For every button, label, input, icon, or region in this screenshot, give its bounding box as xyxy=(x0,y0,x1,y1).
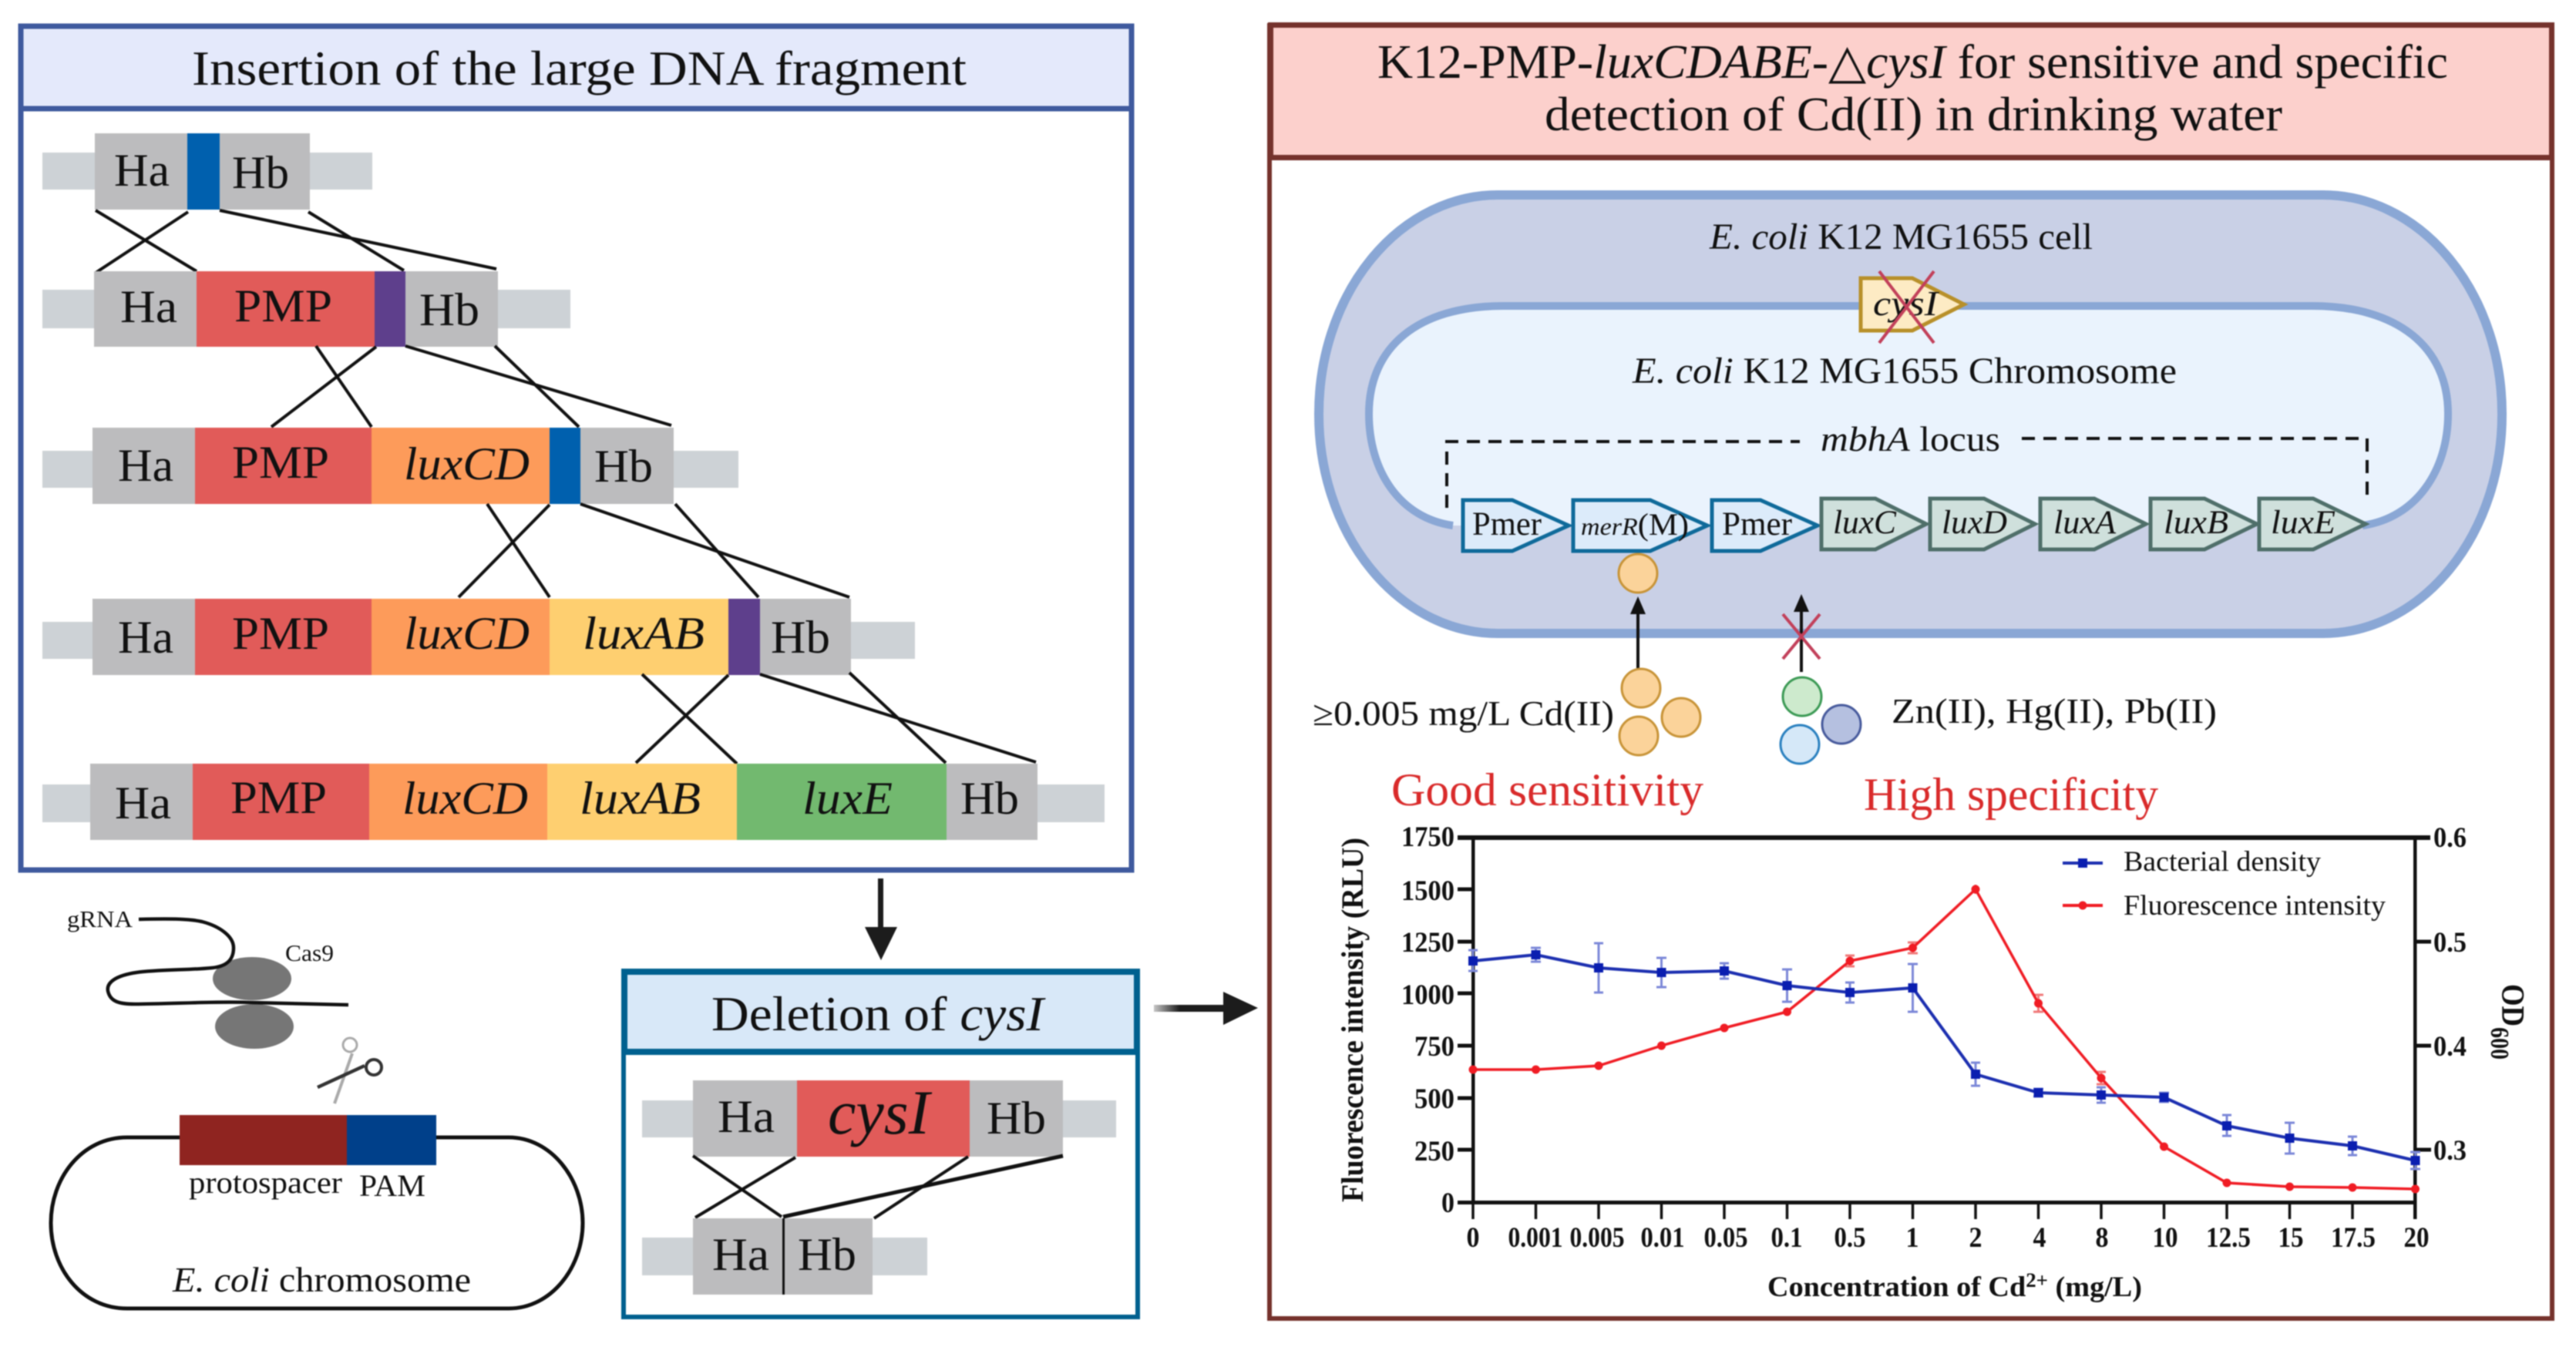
interfering metals label: Zn(II), Hg(II), Pb(II) xyxy=(1892,691,2217,731)
construct row 2: PMP xyxy=(234,280,332,331)
PAM block xyxy=(347,1115,436,1165)
x axis tick labels: 2 xyxy=(1969,1222,1982,1254)
arrow: Cd activates xyxy=(1630,596,1646,668)
panel header: insertion xyxy=(21,26,1132,109)
construct row 2 xyxy=(42,271,570,347)
construct row 5: Hb xyxy=(960,773,1019,824)
y axis title left: Fluorescence intensity (RLU) xyxy=(1335,838,1370,1202)
Cas9 protein xyxy=(213,957,294,1049)
High specificity label: High specificity xyxy=(1864,769,2158,820)
construct row 1 xyxy=(42,133,372,210)
legend: Fluorescence intensity xyxy=(2124,890,2386,922)
gene: luxE xyxy=(2259,499,2366,549)
gene: Pmer 2 xyxy=(1712,500,1818,551)
panel header: deletion xyxy=(624,972,1137,1052)
y axis title right: 600 xyxy=(2485,1027,2514,1060)
x axis tick labels: 20 xyxy=(2403,1222,2430,1254)
x axis tick labels: 4 xyxy=(2033,1222,2046,1254)
panel: insertion of the large DNA fragment xyxy=(21,26,1132,870)
construct row 3: Ha xyxy=(118,440,173,491)
arrow: down to deletion panel xyxy=(865,878,897,960)
heading: detection title: detection of Cd(II) in drinking water xyxy=(1545,89,2282,141)
left axis tick labels: 750 xyxy=(1414,1031,1454,1063)
legend: Bacterial density xyxy=(2124,846,2322,878)
gene: luxC xyxy=(1821,499,1926,549)
right axis tick labels xyxy=(2433,822,2467,1167)
gene: luxB xyxy=(2151,499,2257,549)
mbhA locus label: mbhA locus xyxy=(1821,419,2000,459)
gene: luxD: luxD xyxy=(1942,505,2007,541)
icon: scissors xyxy=(318,1038,382,1103)
gene: merR(M): merR(M) xyxy=(1581,507,1689,542)
cysI construct xyxy=(642,1077,1116,1157)
left axis tick labels: 500 xyxy=(1414,1083,1454,1115)
y axis title right: OD xyxy=(2494,984,2530,1026)
construct row 4: luxAB xyxy=(583,608,705,659)
arrow: right to detection panel xyxy=(1154,992,1258,1025)
crossover lines deletion xyxy=(693,1156,1063,1218)
gene: luxB: luxB xyxy=(2164,505,2228,541)
gene: luxD xyxy=(1930,499,2035,549)
heading: detection title xyxy=(1377,36,2448,141)
construct row 4: PMP xyxy=(232,608,329,659)
gRNA strand xyxy=(108,919,348,1005)
panel: K12 detection xyxy=(1270,25,2552,1318)
x axis tick labels: 0.001 xyxy=(1508,1222,1563,1254)
cysI construct: Ha xyxy=(718,1091,775,1142)
chart axes xyxy=(1458,835,2431,1219)
x axis tick labels: 17.5 xyxy=(2331,1222,2376,1254)
Cd ion bound to merR xyxy=(1619,554,1657,593)
x axis tick labels: 0 xyxy=(1466,1222,1480,1254)
protospacer label: protospacer xyxy=(189,1165,342,1200)
gene: luxA xyxy=(2040,499,2146,549)
construct row 2: Ha xyxy=(120,281,177,332)
Cd ions xyxy=(1619,669,1700,755)
arrow: blocked metals xyxy=(1783,594,1820,672)
cysI construct: cysI xyxy=(828,1077,933,1147)
construct row 5: Ha xyxy=(115,778,171,828)
gene: cysI crossed out xyxy=(1861,271,1964,343)
x axis tick labels: 0.005 xyxy=(1569,1222,1625,1254)
construct row 5: luxE xyxy=(802,773,893,824)
construct row 3 xyxy=(42,428,738,504)
crossover lines 1 to 2 xyxy=(96,210,496,273)
construct row 4: Hb xyxy=(771,612,830,663)
legend xyxy=(2063,846,2386,922)
x axis tick labels: 0.5 xyxy=(1834,1222,1865,1254)
construct row 5 xyxy=(42,764,1105,840)
deleted construct xyxy=(642,1218,927,1295)
x axis title: (mg/L) xyxy=(2048,1271,2142,1303)
cell label: E. coli K12 MG1655 cell xyxy=(1709,217,2093,257)
construct row 4: Ha xyxy=(118,612,173,663)
right axis tick labels: 0.4 xyxy=(2433,1031,2467,1063)
gene: luxE: luxE xyxy=(2271,505,2336,541)
Good sensitivity label: Good sensitivity xyxy=(1391,764,1703,815)
x axis tick labels: 1 xyxy=(1905,1222,1919,1254)
x axis tick labels: 12.5 xyxy=(2206,1222,2251,1254)
left axis tick labels: 0 xyxy=(1441,1187,1454,1219)
x axis tick labels xyxy=(1466,1222,2430,1254)
construct row 1: Hb xyxy=(232,147,289,198)
construct row 1: Ha xyxy=(114,145,170,196)
cysI construct: Hb xyxy=(987,1093,1046,1144)
gene: luxC: luxC xyxy=(1833,505,1897,541)
x axis tick labels: 0.05 xyxy=(1703,1222,1748,1254)
left axis tick labels: 1750 xyxy=(1401,821,1454,853)
heading: insertion title: Insertion of the large DNA fragment xyxy=(192,42,967,96)
x axis tick labels: 0.01 xyxy=(1640,1222,1685,1254)
heading: deletion title: Deletion of cysI xyxy=(711,987,1046,1041)
left axis tick labels xyxy=(1401,821,1454,1219)
gene: Pmer 2: Pmer xyxy=(1722,506,1792,542)
gRNA label: gRNA xyxy=(67,905,133,932)
crossover lines 3 to 4 xyxy=(459,504,849,597)
construct row 3: Hb xyxy=(594,441,653,492)
gene: cysI crossed out: cysI xyxy=(1873,284,1940,323)
y axis title right xyxy=(2485,984,2530,1060)
dashed locus bracket xyxy=(1447,438,2367,508)
construct row 3: luxCD xyxy=(404,438,530,489)
panel: CRISPR Cas9 diagram xyxy=(51,905,583,1308)
construct row 5: PMP xyxy=(230,772,327,823)
right axis tick labels: 0.6 xyxy=(2433,822,2467,854)
construct row 3: PMP xyxy=(232,437,329,488)
left axis tick labels: 1500 xyxy=(1401,875,1454,907)
series: fluorescence intensity xyxy=(1469,885,2420,1193)
left axis tick labels: 1000 xyxy=(1401,979,1454,1011)
left axis tick labels: 250 xyxy=(1414,1136,1454,1167)
construct row 5: luxAB xyxy=(580,773,701,824)
x axis tick labels: 8 xyxy=(2095,1222,2109,1254)
series: fluorescence error bars xyxy=(1845,885,2106,1084)
right axis tick labels: 0.5 xyxy=(2433,927,2467,959)
chromosome outline xyxy=(1369,306,2448,526)
right axis tick labels: 0.3 xyxy=(2433,1135,2467,1167)
protospacer block xyxy=(180,1115,347,1165)
x axis tick labels: 0.1 xyxy=(1771,1222,1802,1254)
construct row 4 xyxy=(42,599,915,675)
deleted construct: Hb xyxy=(798,1229,856,1280)
gene: Pmer 1 xyxy=(1463,500,1569,551)
x axis title: Concentration of Cd xyxy=(1767,1271,2018,1303)
gene: Pmer 1: Pmer xyxy=(1472,506,1542,542)
panel: deletion of cysI xyxy=(624,972,1138,1317)
gene: merR(M) xyxy=(1573,500,1707,551)
construct row 5: luxCD xyxy=(402,773,528,824)
construct row 2: Hb xyxy=(419,284,479,335)
chromosome outline xyxy=(51,1137,583,1308)
line chart: fluorescence and bacterial density xyxy=(1335,821,2530,1303)
gene: luxA: luxA xyxy=(2053,505,2117,541)
x axis tick labels: 10 xyxy=(2152,1222,2178,1254)
heading: detection title: K12-PMP-luxCDABE-△cysI for sensitive and specific xyxy=(1377,36,2448,89)
x axis title: 2+ xyxy=(2026,1269,2048,1292)
chromosome label: E. coli chromosome xyxy=(172,1261,471,1299)
crossover lines 4 to 5 xyxy=(636,673,1036,764)
series: bacterial density xyxy=(1468,950,2420,1165)
chromosome region xyxy=(1369,306,2448,526)
crossover lines 2 to 3 xyxy=(271,346,671,427)
Cas9 label: Cas9 xyxy=(285,939,334,966)
deleted construct: Ha xyxy=(712,1229,769,1280)
construct row 4: luxCD xyxy=(404,608,530,659)
chromosome label: E. coli K12 MG1655 Chromosome xyxy=(1632,351,2177,391)
Cd concentration label: ≥0.005 mg/L Cd(II) xyxy=(1313,694,1614,733)
cell body xyxy=(1319,195,2502,633)
panel header: detection xyxy=(1270,25,2551,157)
interfering metal ions xyxy=(1781,677,1861,764)
left axis tick labels: 1250 xyxy=(1401,927,1454,959)
series: bacterial density error bars xyxy=(1468,943,2420,1169)
PAM label: PAM xyxy=(359,1168,425,1203)
x axis tick labels: 15 xyxy=(2278,1222,2303,1254)
